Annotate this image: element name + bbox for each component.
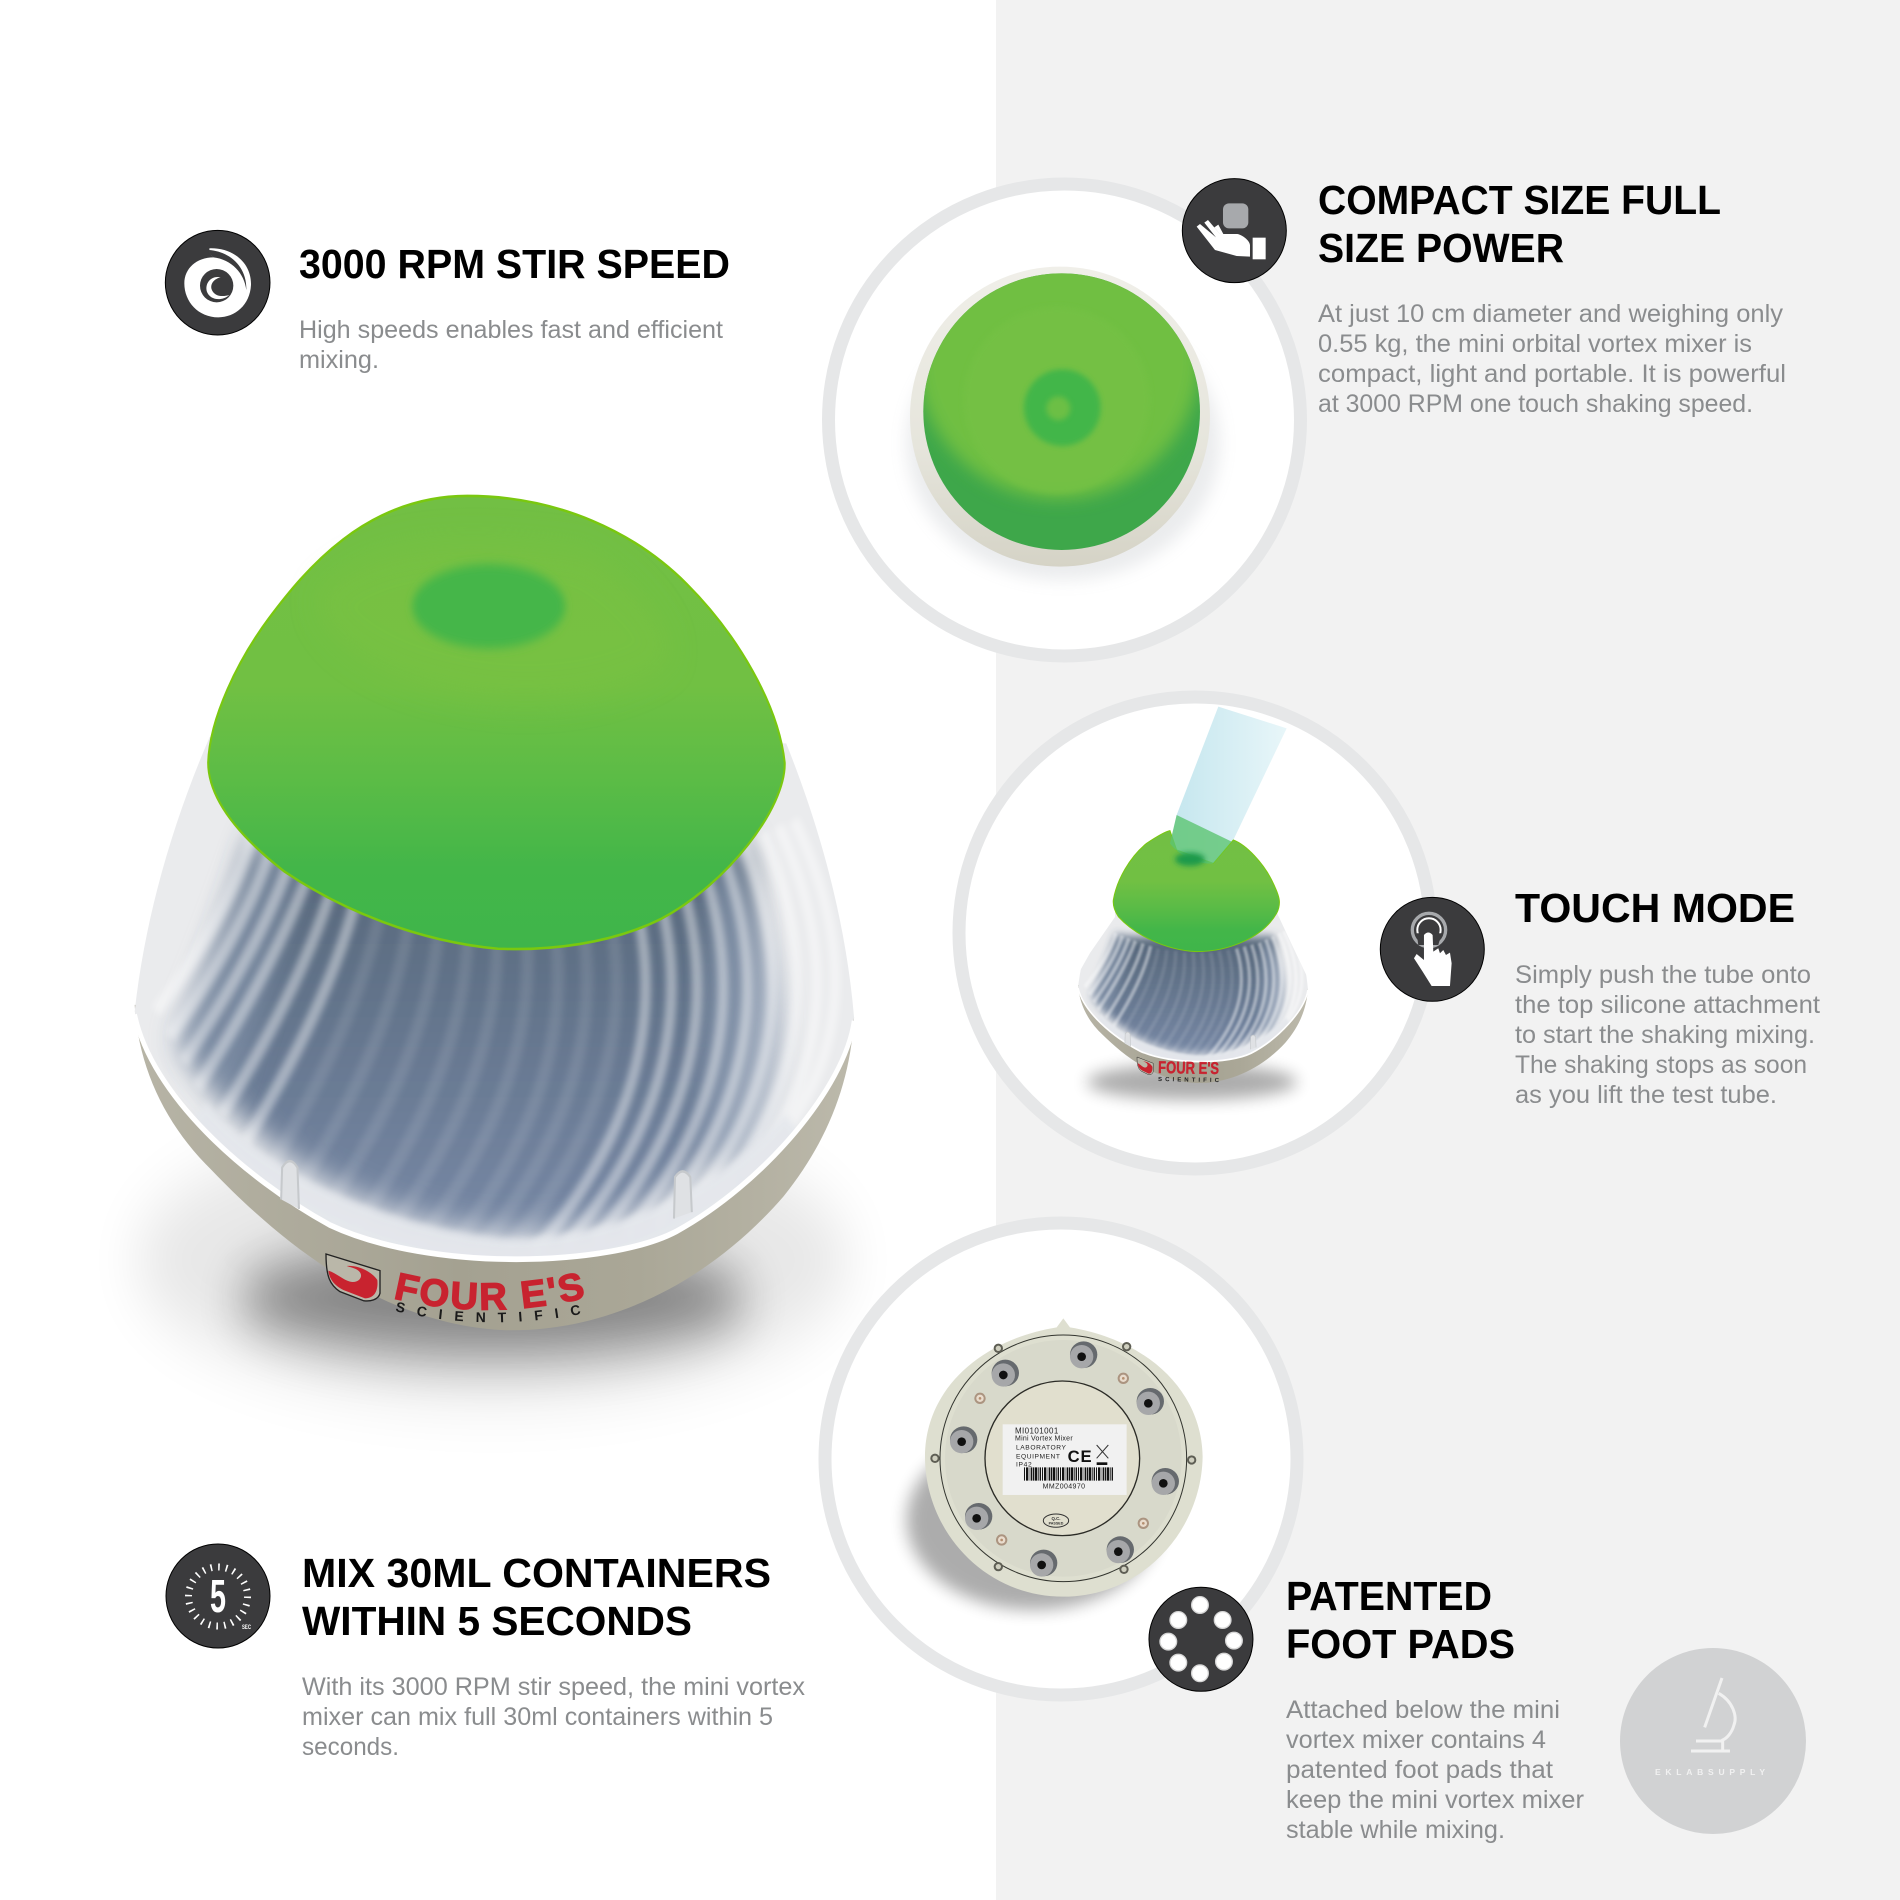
body	[1515, 961, 1820, 1109]
heading	[302, 1550, 771, 1644]
small logo subtitle: SCIENTIFIC	[1158, 1077, 1220, 1084]
heading	[1318, 177, 1721, 271]
brand logo on main mixer	[325, 1253, 584, 1322]
body: Attached below the mini	[1286, 1696, 1560, 1724]
QC passed stamp	[1043, 1514, 1069, 1527]
body: seconds.	[302, 1733, 399, 1761]
body: patented foot pads that	[1286, 1756, 1553, 1784]
grey right background panel	[996, 0, 1900, 1900]
body: With its 3000 RPM stir speed, the mini vortex	[302, 1673, 805, 1701]
body: mixer can mix full 30ml containers within 5	[302, 1703, 773, 1731]
body	[1318, 300, 1786, 418]
mixer floor shadow	[136, 1120, 850, 1400]
text block: foot pads	[1286, 1573, 1584, 1844]
logo wordmark: FOUR E'S	[394, 1272, 584, 1310]
small mixer shadow	[1087, 1064, 1297, 1100]
icon: microscope	[1691, 1678, 1735, 1751]
green silicone cap	[208, 496, 785, 949]
mixer with test tube	[1078, 707, 1308, 1100]
body	[1286, 1696, 1584, 1844]
body: compact, light and portable. It is powerful	[1318, 360, 1786, 388]
body: keep the mini vortex mixer	[1286, 1786, 1584, 1814]
text block: touch mode	[1515, 885, 1820, 1109]
product label: MMZ004970	[1043, 1484, 1085, 1491]
icon: five second timer: SEC	[242, 1625, 251, 1631]
small logo wordmark: FOUR E'S	[1158, 1058, 1219, 1078]
body: High speeds enables fast and efficient	[299, 316, 723, 344]
body: stable while mixing.	[1286, 1816, 1505, 1844]
product label: MI0101001	[1015, 1426, 1059, 1435]
ring: foot pads	[825, 1223, 1297, 1695]
ring: touch mode	[959, 697, 1431, 1169]
heading: MIX 30ML CONTAINERS	[302, 1550, 771, 1596]
heading	[1286, 1573, 1515, 1667]
icon: foot pad dots	[1149, 1587, 1253, 1691]
text block: compact size	[1318, 177, 1786, 418]
icon: five second timer: 5	[210, 1570, 226, 1622]
body: 0.55 kg, the mini orbital vortex mixer is	[1318, 330, 1752, 358]
product label: Mini Vortex Mixer	[1015, 1436, 1073, 1443]
logo shield	[326, 1254, 380, 1301]
body: as you lift the test tube.	[1515, 1081, 1777, 1109]
product label: EQUIPMENT	[1016, 1453, 1060, 1460]
icon: five second timer	[166, 1544, 270, 1648]
text block: stir speed	[299, 241, 730, 374]
body: Simply push the tube onto	[1515, 961, 1811, 989]
icon: touch finger	[1380, 897, 1484, 1001]
product label	[1003, 1424, 1127, 1495]
test tube	[1170, 707, 1287, 863]
QC passed stamp: Q.C.	[1052, 1516, 1060, 1521]
text block: 30ml containers	[302, 1550, 805, 1761]
body	[302, 1673, 805, 1761]
product label: LABORATORY	[1016, 1444, 1067, 1451]
heading: SIZE POWER	[1318, 225, 1564, 271]
heading: TOUCH MODE	[1515, 885, 1795, 931]
top view shadow	[907, 307, 1220, 580]
icon: hand holding device	[1182, 179, 1286, 283]
body: At just 10 cm diameter and weighing only	[1318, 300, 1783, 328]
heading: FOOT PADS	[1286, 1621, 1515, 1667]
body: at 3000 RPM one touch shaking speed.	[1318, 390, 1753, 418]
QC passed stamp: PASSED	[1049, 1522, 1064, 1526]
heading: COMPACT SIZE FULL	[1318, 177, 1721, 223]
icon: spiral	[165, 230, 270, 335]
body: the top silicone attachment	[1515, 991, 1820, 1019]
body	[299, 316, 723, 374]
watermark badge: EKLABSUPPLY	[1620, 1648, 1806, 1834]
underside view of mixer	[907, 1318, 1203, 1610]
underside shadow	[907, 1430, 1160, 1610]
body: vortex mixer contains 4	[1286, 1726, 1546, 1754]
main product image: mini vortex mixer	[135, 496, 854, 1400]
ring: top view	[828, 184, 1300, 656]
heading: WITHIN 5 SECONDS	[302, 1598, 692, 1644]
body: to start the shaking mixing.	[1515, 1021, 1815, 1049]
top view of mixer	[905, 266, 1222, 582]
product label: C E	[1068, 1447, 1092, 1466]
body: The shaking stops as soon	[1515, 1051, 1807, 1079]
logo subtitle: SCIENTIFIC	[396, 1302, 580, 1322]
watermark text: EKLABSUPPLY	[1655, 1767, 1765, 1777]
tube tip in cap	[1170, 815, 1232, 864]
product label: IP42	[1016, 1462, 1032, 1469]
heading: PATENTED	[1286, 1573, 1492, 1619]
small green cap	[1113, 831, 1279, 952]
body: mixing.	[299, 346, 379, 374]
heading: 3000 RPM STIR SPEED	[299, 241, 730, 287]
